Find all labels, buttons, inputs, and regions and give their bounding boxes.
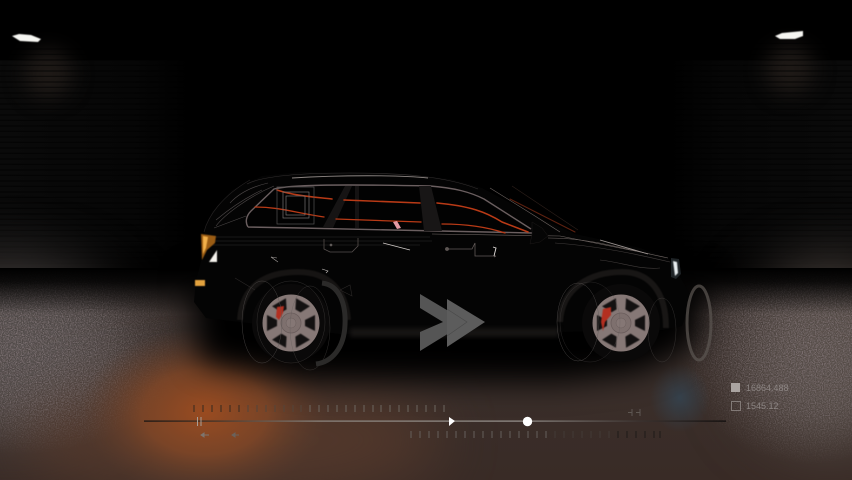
rear door handle <box>324 238 358 252</box>
timeline <box>144 405 726 438</box>
bottom tick row <box>411 431 660 438</box>
main scrub line <box>144 420 726 422</box>
right small arrow <box>232 433 239 437</box>
right brick wall glow <box>670 42 852 280</box>
front brake caliper <box>601 307 611 331</box>
front wheel arch <box>560 272 666 328</box>
HUD rings around front wheel <box>557 282 711 362</box>
start marker <box>198 417 201 426</box>
end marker <box>628 409 640 416</box>
rear wheel <box>252 284 330 362</box>
legend <box>731 383 789 411</box>
car <box>194 172 692 337</box>
door pillars <box>323 186 442 231</box>
pink window reflection <box>393 221 401 229</box>
tail light <box>201 234 217 262</box>
forward chevron arrows <box>420 294 485 351</box>
rear wheel arch <box>240 272 348 320</box>
right ceiling lamp <box>775 31 803 39</box>
left brick wall glow <box>0 44 190 280</box>
front wheel <box>582 284 660 362</box>
lower rear light <box>195 280 205 286</box>
left small arrow <box>201 433 209 437</box>
play marker <box>449 417 455 426</box>
legend value two: 1545.12 <box>746 401 779 411</box>
legend value one: 16864.488 <box>746 383 789 393</box>
HUD target squares on rear window <box>277 187 314 224</box>
top tick row <box>194 405 444 412</box>
body highlight band <box>350 328 560 337</box>
side mirror <box>530 222 548 244</box>
legend swatch filled <box>731 383 740 392</box>
front door handle <box>446 243 496 257</box>
roof and hood contour lines <box>204 173 670 296</box>
position dot <box>523 417 532 426</box>
car shadow on floor <box>190 275 705 382</box>
side windows <box>246 185 532 234</box>
car body silhouette <box>194 172 692 334</box>
rear brake caliper <box>276 306 284 320</box>
window frame <box>246 185 532 233</box>
legend swatch outline <box>732 402 740 410</box>
floor <box>0 240 852 480</box>
red reflection lines <box>255 190 575 233</box>
headlight <box>671 258 681 279</box>
left ceiling lamp <box>12 34 41 42</box>
HUD rings around rear wheel <box>242 281 345 370</box>
